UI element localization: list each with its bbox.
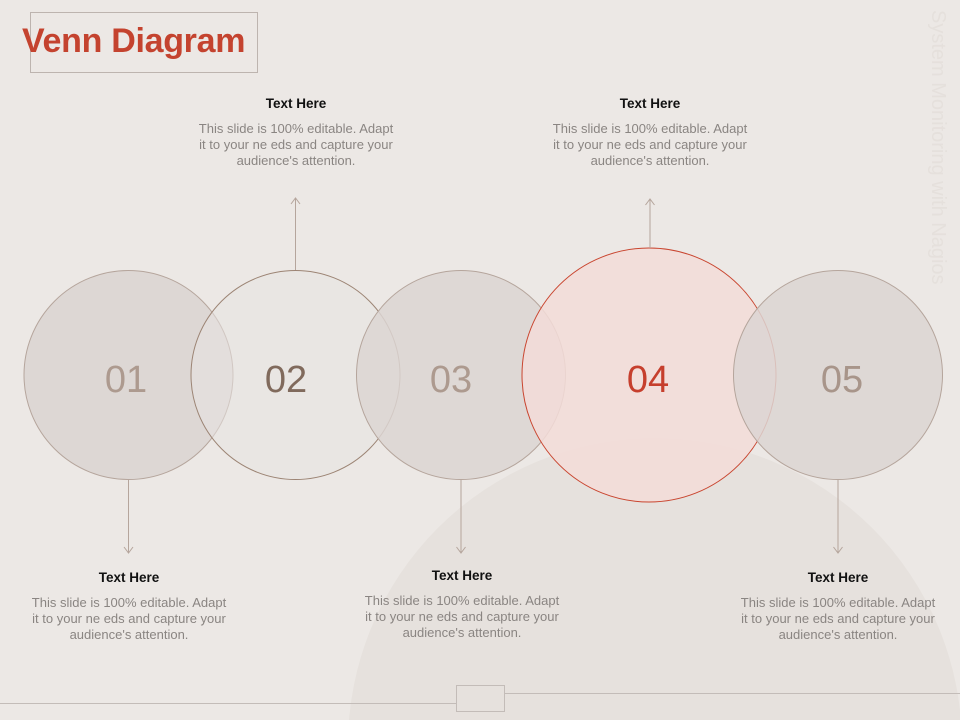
arrow down 05: [834, 480, 842, 553]
arrow down 03: [456, 480, 466, 553]
text block 02: it to your ne eds and capture your: [199, 137, 393, 152]
text block 04: audience's attention.: [591, 153, 709, 168]
text block 03: audience's attention.: [403, 625, 521, 640]
arrow up 02: [291, 198, 300, 270]
text block 02: This slide is 100% editable. Adapt: [199, 121, 393, 136]
text block 05: audience's attention.: [779, 627, 897, 642]
title box: [30, 12, 258, 72]
circle 01: 01: [105, 359, 147, 401]
text block 05: [741, 570, 936, 642]
text block 05: it to your ne eds and capture your: [741, 611, 935, 626]
arrow down 01: [124, 480, 133, 553]
circle 02: 02: [265, 359, 307, 401]
text block 01: Text Here: [99, 570, 159, 585]
text block 01: audience's attention.: [70, 627, 188, 642]
text block 05: This slide is 100% editable. Adapt: [741, 595, 935, 610]
circle 02: [191, 270, 400, 480]
text block 04: This slide is 100% editable. Adapt: [553, 121, 747, 136]
text block 02: Text Here: [266, 96, 326, 111]
circle 01: [24, 270, 233, 480]
vertical watermark: System Monitoring with Nagios: [927, 10, 949, 285]
text block 03: [365, 568, 560, 640]
text block 01: [32, 570, 226, 642]
circle 04: [522, 248, 776, 502]
text block 01: This slide is 100% editable. Adapt: [32, 595, 226, 610]
title: Venn Diagram: [22, 22, 245, 60]
circle 03: [356, 270, 566, 480]
text block 02: [199, 96, 394, 168]
arrow up 04: [646, 199, 654, 248]
text block 04: Text Here: [620, 96, 680, 111]
text block 05: Text Here: [808, 570, 868, 585]
text block 03: it to your ne eds and capture your: [365, 609, 559, 624]
text block 04: [553, 96, 748, 168]
circle 03: 03: [430, 359, 472, 401]
text block 01: it to your ne eds and capture your: [32, 611, 226, 626]
text block 03: Text Here: [432, 568, 492, 583]
text block 04: it to your ne eds and capture your: [553, 137, 747, 152]
circle 05: 05: [821, 359, 863, 401]
circle 05: [734, 270, 942, 480]
circle 04: 04: [627, 359, 669, 401]
text block 03: This slide is 100% editable. Adapt: [365, 593, 559, 608]
text block 02: audience's attention.: [237, 153, 355, 168]
